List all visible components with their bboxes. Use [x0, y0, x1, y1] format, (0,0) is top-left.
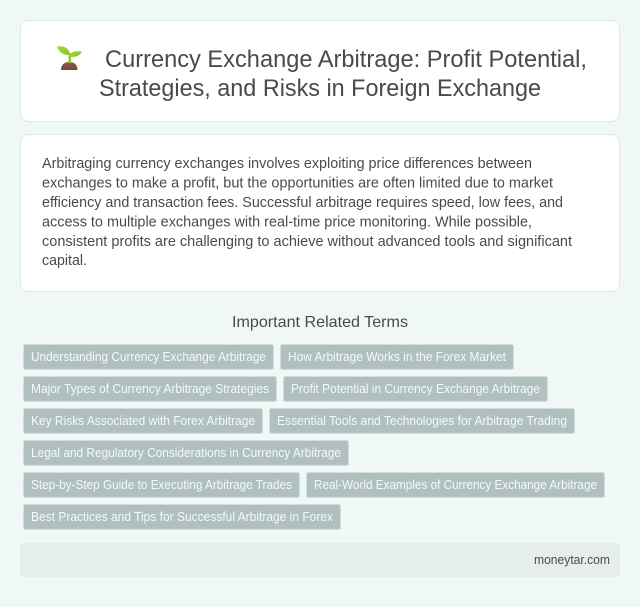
tag: Real-World Examples of Currency Exchange Arbitrage: [314, 478, 597, 492]
text block: description paragraph: [42, 155, 573, 269]
tag: [270, 408, 574, 434]
tag: Understanding Currency Exchange Arbitrage: [31, 350, 266, 364]
tag: [24, 376, 276, 402]
panel: header card: [20, 20, 620, 122]
tag list: [24, 344, 604, 530]
tag: Key Risks Associated with Forex Arbitrage: [31, 414, 255, 428]
tag: [306, 472, 604, 498]
tag: Essential Tools and Technologies for Arbitrage Trading: [277, 414, 567, 428]
tag: [24, 472, 300, 498]
tag: Step-by-Step Guide to Executing Arbitrage Trades: [31, 478, 292, 492]
title: [99, 46, 587, 102]
tag: Legal and Regulatory Considerations in Currency Arbitrage: [31, 446, 341, 460]
text block: description paragraph: Arbitraging currency exchanges involves exploiting price differences between: [42, 155, 532, 172]
text block: description paragraph: access to multiple exchanges with real-time price monitoring. While possible,: [42, 214, 532, 230]
title: Currency Exchange Arbitrage: Profit Potential,: [105, 46, 587, 73]
text block: description paragraph: consistent profits are challenging to achieve without advanced tools and significant: [42, 233, 573, 250]
title: Strategies, and Risks in Foreign Exchange: [99, 75, 541, 102]
footer: [20, 543, 620, 577]
text block: description paragraph: capital.: [42, 252, 87, 269]
tag: [24, 440, 348, 466]
tag: Best Practices and Tips for Successful Arbitrage in Forex: [31, 510, 334, 524]
text block: description paragraph: exchanges to make a profit, but the opportunities are often limited due to market: [42, 174, 554, 192]
tag: How Arbitrage Works in the Forex Market: [288, 350, 506, 364]
footer text: moneytar.com: [534, 552, 610, 567]
tag: [24, 408, 262, 434]
tag: Major Types of Currency Arbitrage Strategies: [31, 382, 269, 396]
panel: description: [20, 134, 620, 292]
heading: related terms: Important Related Terms: [232, 314, 408, 331]
tag: [284, 376, 548, 402]
tag: [24, 504, 340, 530]
tag: Profit Potential in Currency Exchange Arbitrage: [291, 382, 540, 396]
text block: description paragraph: efficiency and transaction fees. Successful arbitrage requires speed, low fees, and: [42, 194, 563, 211]
icon: sprout: [57, 46, 82, 70]
tag: [280, 344, 514, 370]
tag: [24, 344, 274, 370]
